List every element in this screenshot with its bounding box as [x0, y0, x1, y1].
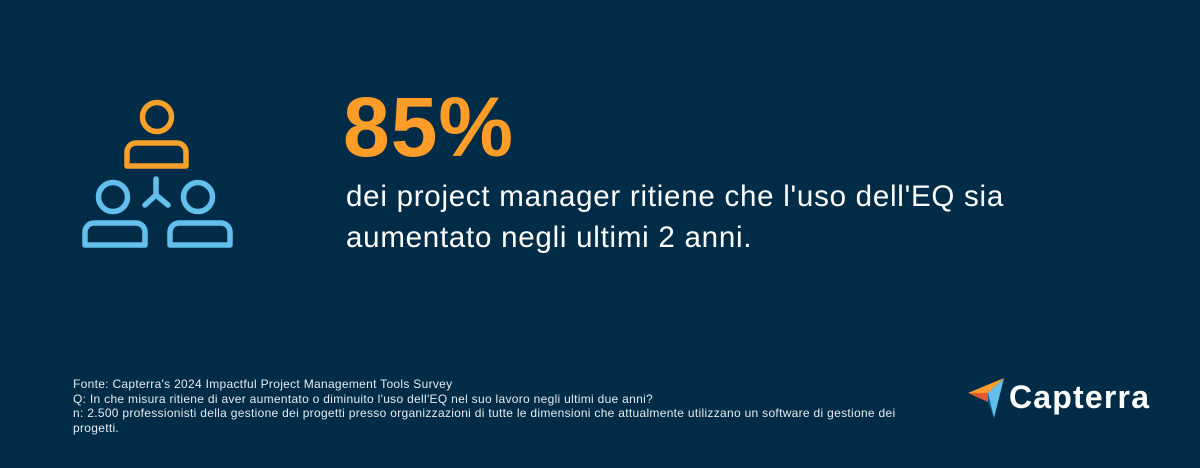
headline stat: 85%	[343, 80, 514, 174]
description text: dei project manager ritiene che l'uso dell'EQ sia	[346, 180, 1004, 213]
footer source notes: n: 2.500 professionisti della gestione dei progetti presso organizzazioni di tutte le dimensioni che attualmente utilizzano un software di gestione dei	[73, 406, 895, 420]
footer source notes: progetti.	[73, 420, 119, 434]
footer source notes	[73, 377, 895, 434]
footer source notes: Fonte: Capterra's 2024 Impactful Project Management Tools Survey	[73, 377, 452, 391]
description text: aumentato negli ultimi 2 anni.	[346, 221, 752, 254]
description text	[346, 180, 1004, 254]
logo: Capterra: Capterra	[1009, 379, 1150, 415]
icon: people hierarchy	[82, 100, 233, 248]
logo: Capterra	[968, 378, 1150, 418]
footer source notes: Q: In che misura ritiene di aver aumentato o diminuito l'uso dell'EQ nel suo lavoro negli ultimi due anni?	[73, 392, 653, 406]
